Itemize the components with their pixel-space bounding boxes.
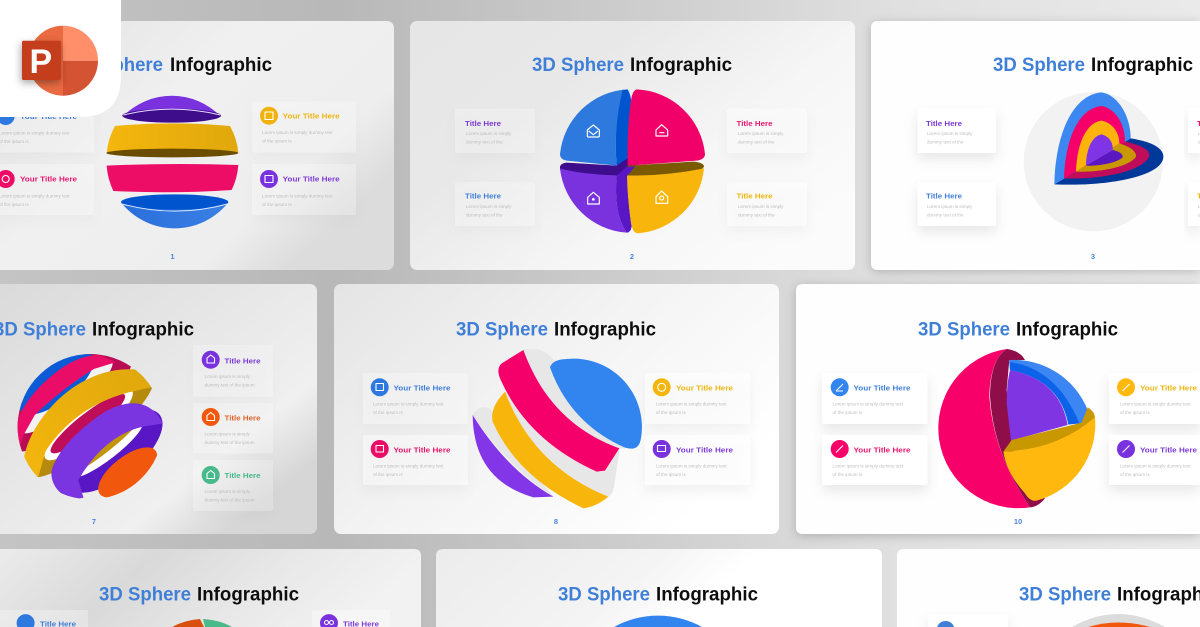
- card: blue title: [822, 373, 928, 424]
- sphere: horizontal slices: [106, 96, 238, 228]
- page number 8: 8: [554, 517, 558, 526]
- card: yellow title right: Your Title Here: [283, 112, 340, 120]
- card: yellow title: Lorem ipsum is simply: [738, 204, 784, 209]
- panel: slide 2 quartered sphere: [410, 21, 855, 270]
- card: purple title: Title Here: [465, 119, 501, 128]
- panel: slide 1 layered sphere: [0, 21, 394, 270]
- card: yellow title: [727, 182, 807, 226]
- card: blue title left: [0, 101, 94, 152]
- card: purple title: of the ipsum is: [1120, 472, 1150, 477]
- card: purple title: of the ipsum is: [656, 472, 686, 477]
- page number 3: 3: [1091, 252, 1095, 261]
- card: purple title: [645, 435, 750, 485]
- card: pink title: Lorem ipsum is simply dummy text: [832, 464, 904, 468]
- card: purple title: Title Here: [926, 119, 962, 128]
- card: pink title: [822, 435, 928, 485]
- card: yellow title: dummy text of the: [738, 212, 775, 218]
- heading: bottom-right title: [1019, 584, 1200, 606]
- card: pink title: dummy text of the: [738, 140, 775, 144]
- card: purple title: Your Title Here: [676, 446, 733, 454]
- card: green title: Lorem ipsum is simply: [204, 489, 251, 494]
- card: purple title: dummy text of the ipsum: [204, 382, 255, 388]
- card: yellow title: of the ipsum is: [1120, 410, 1150, 415]
- card: orange title: Lorem ipsum is simply: [204, 432, 251, 436]
- card: purple title: Your Title Here: [1140, 446, 1197, 454]
- heading: slide 10 title: Infographic: [1016, 320, 1118, 340]
- card: yellow title: Your Title Here: [676, 384, 733, 392]
- heading: bottom-left title: 3D Sphere: [99, 584, 191, 606]
- card: pink title: [1188, 108, 1200, 153]
- heading: slide 7 title: [0, 320, 194, 340]
- card: blue title: dummy text of the: [466, 212, 503, 218]
- heading: slide 1 title: Infographic: [170, 55, 272, 76]
- card: blue title: [918, 182, 996, 226]
- heading: slide 8 title: Infographic: [554, 320, 656, 340]
- sphere: four quarters: [560, 89, 705, 233]
- card: blue title left: Lorem ipsum is simply dummy text: [0, 130, 70, 136]
- badge: white corner panel: [0, 0, 121, 117]
- heading: bottom-left title: Infographic: [197, 584, 299, 606]
- heading: bottom-middle title: 3D Sphere: [558, 584, 650, 606]
- card: pink title: Your Title Here: [854, 446, 910, 454]
- card: yellow title: of the ipsum is: [656, 410, 686, 415]
- sphere top: grey and orange: [1072, 614, 1165, 627]
- card: purple title: [193, 345, 273, 396]
- card: pink title: [727, 108, 807, 153]
- card: pink title left: [0, 164, 94, 215]
- heading: slide 7 title: Infographic: [92, 320, 194, 340]
- card: purple title: Lorem ipsum is simply: [466, 131, 512, 136]
- card: blue title: Lorem ipsum is simply dummy text: [832, 402, 904, 406]
- card: purple title: dummy text of the: [927, 140, 964, 144]
- card: pink title: of the ipsum is: [373, 472, 403, 477]
- card: blue title: [0, 610, 88, 627]
- card: purple title: Lorem ipsum is simply dummy text: [656, 464, 727, 468]
- card: purple title right: Lorem ipsum is simply dummy text: [262, 194, 333, 198]
- page number 2: 2: [630, 252, 634, 261]
- heading: slide 1 title: [71, 55, 272, 76]
- panel: bottom-row slide right: [897, 549, 1200, 627]
- sphere: cutaway layers: [938, 349, 1095, 508]
- icon: PowerPoint logo: [22, 26, 98, 96]
- card: pink title: Title Here: [736, 119, 772, 128]
- card: purple title: [1109, 435, 1200, 485]
- card: pink title: Lorem ipsum is simply: [738, 131, 784, 136]
- heading: slide 2 title: Infographic: [630, 55, 732, 76]
- icon: PowerPoint logo: P: [30, 43, 52, 81]
- card: blue title: [363, 373, 468, 424]
- card: purple title: Lorem ipsum is simply: [927, 131, 973, 136]
- card: blue title: Your Title Here: [854, 384, 910, 392]
- sphere top: orange and green: [172, 619, 232, 627]
- card: blue title: of the ipsum is: [373, 410, 403, 415]
- card: blue title: of the ipsum is: [832, 410, 863, 415]
- sphere: heart cut-out: [1024, 92, 1163, 231]
- card: pink title: Your Title Here: [394, 446, 450, 454]
- card: blue title: dummy text of the: [927, 212, 964, 218]
- card: yellow title: [1109, 373, 1200, 424]
- card: yellow title right: of the ipsum is: [262, 138, 292, 144]
- card: pink title: of the ipsum is: [832, 472, 863, 477]
- card: green title: Title Here: [224, 471, 260, 480]
- card: purple title right: of the ipsum is: [262, 202, 292, 207]
- card: yellow title: Lorem ipsum is simply dummy text: [656, 402, 727, 406]
- panel: bottom-row slide middle: [436, 549, 882, 627]
- panel: slide 7 ribbon sphere: [0, 284, 317, 535]
- card: yellow title: Lorem ipsum is simply dummy text: [1120, 402, 1191, 406]
- heading: slide 3 title: Infographic: [1091, 55, 1193, 76]
- heading: bottom-left title: [99, 584, 299, 606]
- panel: slide 3 heart in sphere: [871, 21, 1200, 270]
- card: yellow title right: Lorem ipsum is simply dummy text: [262, 130, 333, 135]
- heading: slide 10 title: 3D Sphere: [918, 320, 1010, 340]
- card: purple title: dummy text of the: [466, 140, 503, 144]
- page number 7: 7: [92, 517, 96, 526]
- page number 10: 10: [1014, 517, 1022, 526]
- card: blue title: Title Here: [926, 192, 962, 200]
- card: pink title: Lorem ipsum is simply dummy text: [373, 464, 444, 468]
- card: purple title: Lorem ipsum is simply dummy text: [1120, 464, 1191, 468]
- panel: slide 10 cutaway sphere: [796, 284, 1200, 534]
- card: blue icon strip: [928, 614, 1008, 627]
- card: green title: dummy text of the ipsum: [204, 498, 255, 502]
- card: green title: [193, 460, 273, 511]
- card: yellow title: [645, 373, 750, 424]
- card: orange title: dummy text of the ipsum: [204, 440, 255, 445]
- heading: slide 1 title: 3D Sphere: [71, 55, 163, 76]
- heading: bottom-right title: 3D Sphere: [1019, 584, 1111, 606]
- sphere top: blue: [614, 616, 702, 627]
- card: blue title: Lorem ipsum is simply: [466, 204, 512, 209]
- card: purple title: [918, 108, 996, 153]
- card: pink title left: Your Title Here: [20, 174, 77, 184]
- card: purple title right: [252, 164, 356, 215]
- sphere: tilted slices: [473, 349, 642, 508]
- card: yellow title: Your Title Here: [1140, 384, 1197, 392]
- card: purple title right: Your Title Here: [283, 174, 340, 184]
- page number 1: 1: [170, 252, 175, 261]
- heading: slide 10 title: [918, 320, 1118, 340]
- card: purple title: Title Here: [224, 356, 260, 366]
- heading: slide 3 title: [993, 55, 1193, 76]
- card: yellow title: [1188, 182, 1200, 226]
- card: pink title: [363, 435, 468, 485]
- card: orange title: Title Here: [224, 414, 260, 422]
- card: blue title: Lorem ipsum is simply: [927, 204, 973, 209]
- heading: slide 8 title: [456, 320, 656, 340]
- heading: slide 3 title: 3D Sphere: [993, 55, 1085, 76]
- sphere: ribbons: [18, 354, 163, 498]
- heading: slide 2 title: 3D Sphere: [532, 55, 624, 76]
- heading: bottom-middle title: Infographic: [656, 584, 758, 606]
- card: blue title: Your Title Here: [394, 384, 450, 392]
- card: yellow title right: [252, 102, 356, 152]
- heading: bottom-middle title: [558, 584, 758, 606]
- card: blue title: [455, 182, 535, 226]
- card: blue title left: Your Title Here: [20, 112, 77, 121]
- card: yellow title: Title Here: [736, 192, 772, 200]
- card: orange title: [193, 403, 273, 454]
- card: purple title: [312, 610, 390, 627]
- heading: slide 2 title: [532, 55, 732, 76]
- card: pink title left: Lorem ipsum is simply dummy text: [0, 194, 70, 198]
- card: purple title: [455, 108, 535, 153]
- card: purple title: Lorem ipsum is simply: [204, 374, 251, 379]
- panel: bottom-row slide left: [0, 549, 421, 627]
- heading: slide 8 title: 3D Sphere: [456, 320, 548, 340]
- panel: slide 8 tilted sphere: [334, 284, 779, 534]
- card: blue title: Lorem ipsum is simply dummy text: [373, 402, 444, 406]
- card: blue title: Title Here: [465, 192, 501, 200]
